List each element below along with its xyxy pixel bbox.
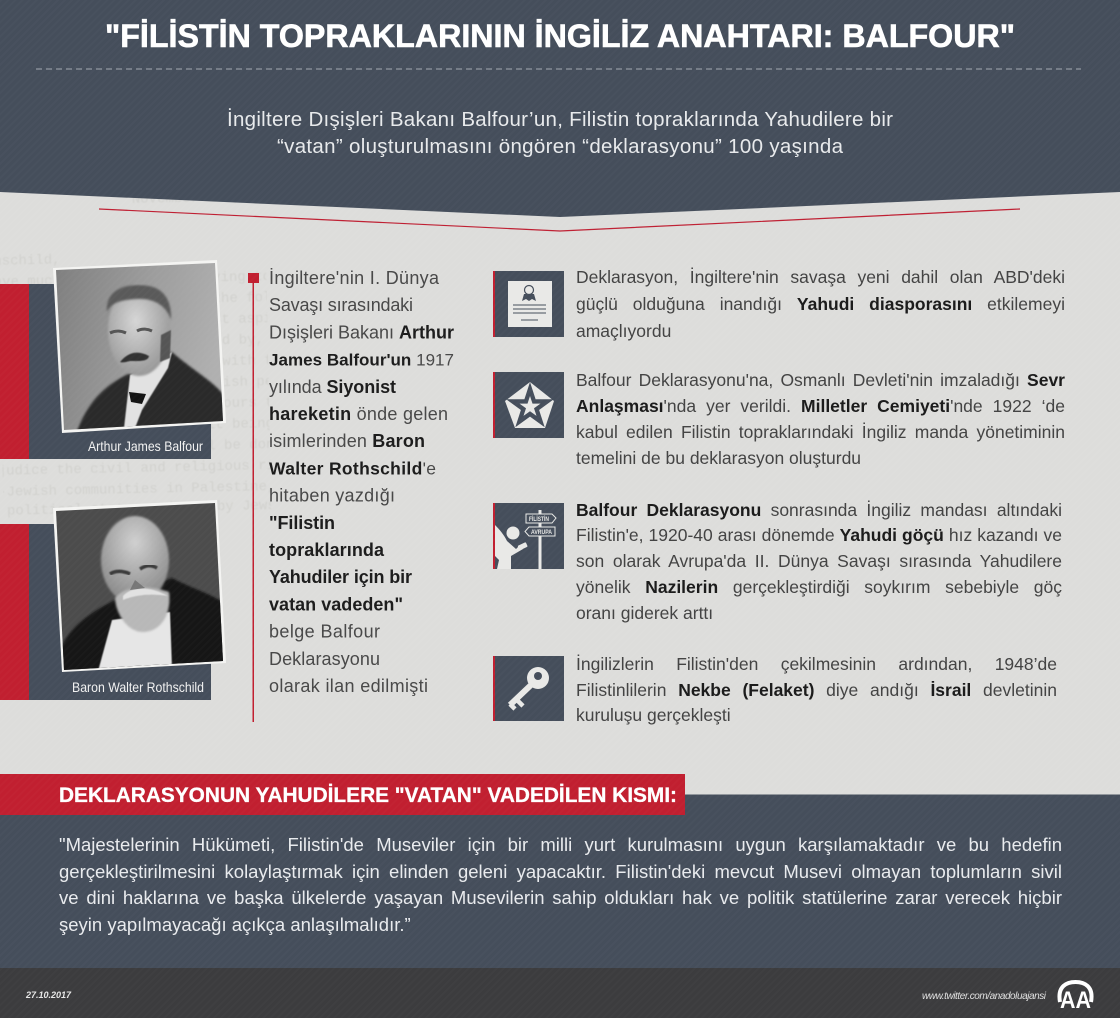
text block: Nakba and Israel: kuruluşu gerçekleşti — [576, 705, 731, 725]
banner: declaration heading — [0, 774, 685, 815]
footer date: 27.10.2017 — [25, 990, 72, 1000]
text block: Balfour narrative: olarak ilan edilmişti — [269, 676, 428, 696]
text block: declaration quote: gerçekleştirilmesini kolaylaştırmak için elinden geleni yapacaktır. Filistin'deki mevcut Musevi olmayan toplumların sivil — [59, 861, 1062, 882]
text block: declaration quote — [59, 834, 1062, 935]
text block: diaspora — [576, 267, 1065, 341]
text block: Sevr and League of Nations: kabul edilen Filistin topraklarındaki İngiliz manda yönetiminin — [576, 422, 1065, 442]
footer twitter address: www.twitter.com/anadoluajansi — [922, 991, 1047, 1002]
text block: declaration quote: "Majestelerinin Hükümeti, Filistin'de Museviler için bir milli yurt kurulmasını uygun karşılamaktadır ve bu hedefin — [59, 834, 1062, 855]
caption: Baron Walter Rothschild: Baron Walter Rothschild — [72, 679, 204, 695]
icon: certificate document — [493, 271, 564, 337]
text block: Balfour narrative: Deklarasyonu — [269, 649, 380, 669]
faint typewritten letter in the background: November 2nd, 1917 — [132, 189, 283, 208]
subtitle — [227, 108, 893, 158]
footer bar — [0, 968, 1120, 1018]
icon: star in pentagon — [493, 372, 564, 438]
text block: Nakba and Israel — [576, 654, 1057, 725]
text block: Balfour narrative: hareketin önde gelen — [269, 404, 448, 424]
text block: diaspora: amaçlıyordu — [576, 321, 671, 341]
caption: Arthur James Balfour: Arthur James Balfour — [88, 438, 203, 454]
subtitle: İngiltere Dışişleri Bakanı Balfour’un, Filistin topraklarında Yahudilere bir — [227, 108, 893, 131]
text block: Balfour narrative: yılında Siyonist — [269, 377, 396, 397]
text block: Jewish migration: son olarak Avrupa'da II. Dünya Savaşı sırasında Yahudilere — [576, 551, 1062, 571]
text block: Balfour narrative — [269, 268, 454, 696]
title: "FİLİSTİN TOPRAKLARININ İNGİLİZ ANAHTARI: BALFOUR" — [105, 18, 1015, 54]
text block: diaspora: güçlü olduğuna inandığı Yahudi diasporasını etkilemeyi — [576, 294, 1065, 314]
timeline rule and marker — [248, 273, 259, 722]
text block: Jewish migration: yönelik Nazilerin gerçekleştirdiği soykırım sebebiyle göç — [576, 577, 1062, 597]
header band — [0, 0, 1120, 217]
photo: Baron Walter Rothschild — [50, 498, 230, 678]
panel: declaration quote band — [0, 794, 1120, 968]
text block: Balfour narrative: İngiltere'nin I. Dünya — [269, 268, 440, 288]
text block: Sevr and League of Nations: temelini de bu deklarasyon oluşturdu — [576, 448, 861, 468]
panel: Arthur James Balfour portrait card — [0, 258, 230, 459]
subtitle: “vatan” oluşturulmasını öngören “deklarasyonu” 100 yaşında — [277, 135, 844, 158]
text block: Nakba and Israel: İngilizlerin Filistin'den çekilmesinin ardından, 1948’de — [576, 654, 1057, 674]
icon: Anadolu Agency logo: AA — [1060, 987, 1091, 1014]
icon: migrant at signpost — [493, 503, 564, 569]
text block: Balfour narrative: James Balfour'un 1917 — [269, 351, 454, 370]
text block: Balfour narrative: isimlerinden Baron — [269, 431, 425, 451]
red chevron line — [99, 209, 1020, 231]
text block: Balfour narrative: Yahudiler için bir — [269, 567, 412, 587]
icon: migrant at signpost: AVRUPA — [531, 530, 553, 536]
photo: Arthur James Balfour — [50, 258, 230, 440]
text block: Balfour narrative: "Filistin — [269, 513, 335, 533]
text block: Jewish migration: oranı giderek arttı — [576, 603, 713, 623]
text block: Jewish migration: Filistin'e, 1920-40 arası dönemde Yahudi göçü hız kazandı ve — [576, 525, 1062, 545]
panel: Baron Walter Rothschild portrait card — [0, 498, 230, 700]
text block: Balfour narrative: topraklarında — [269, 540, 385, 560]
text block: Balfour narrative: Savaşı sırasındaki — [269, 295, 413, 315]
text block: Balfour narrative: belge Balfour — [269, 622, 380, 642]
text block: diaspora: Deklarasyon, İngiltere'nin savaşa yeni dahil olan ABD'deki — [576, 267, 1065, 287]
faint typewritten letter in the background — [0, 198, 270, 516]
text block: declaration quote: şeyin yapılmayacağı açıkça anlaşılmalıdır.” — [59, 914, 411, 935]
text block: Nakba and Israel: Filistinlilerin Nekbe (Felaket) diye andığı İsrail devletinin — [576, 680, 1057, 700]
text block: Jewish migration — [576, 500, 1062, 623]
text block: Jewish migration: Balfour Deklarasyonu sonrasında İngiliz mandası altındaki — [576, 500, 1062, 520]
text block: Sevr and League of Nations: Balfour Deklarasyonu'na, Osmanlı Devleti'nin imzaladığı Sevr — [576, 370, 1065, 390]
banner: declaration heading: DEKLARASYONUN YAHUDİLERE "VATAN" VADEDİLEN KISMI: — [59, 784, 677, 807]
text block: Balfour narrative: Dışişleri Bakanı Arthur — [269, 322, 454, 342]
text block: Sevr and League of Nations — [576, 370, 1065, 468]
text block: Balfour narrative: vatan vadeden" — [269, 594, 403, 614]
text block: Balfour narrative: Walter Rothschild'e — [269, 458, 436, 478]
icon: key — [493, 656, 564, 721]
icon: migrant at signpost: FİLİSTİN — [529, 516, 549, 523]
text block: Sevr and League of Nations: Anlaşması'nda yer verildi. Milletler Cemiyeti'nde 1922 ‘de — [576, 396, 1065, 416]
text block: Balfour narrative: hitaben yazdığı — [269, 486, 395, 506]
text block: declaration quote: ve dini haklarına ve başka ülkelerde yaşayan Musevilerin sahip oldukları hak ve politik statülerine zarar verecek hiçbir — [59, 887, 1062, 908]
